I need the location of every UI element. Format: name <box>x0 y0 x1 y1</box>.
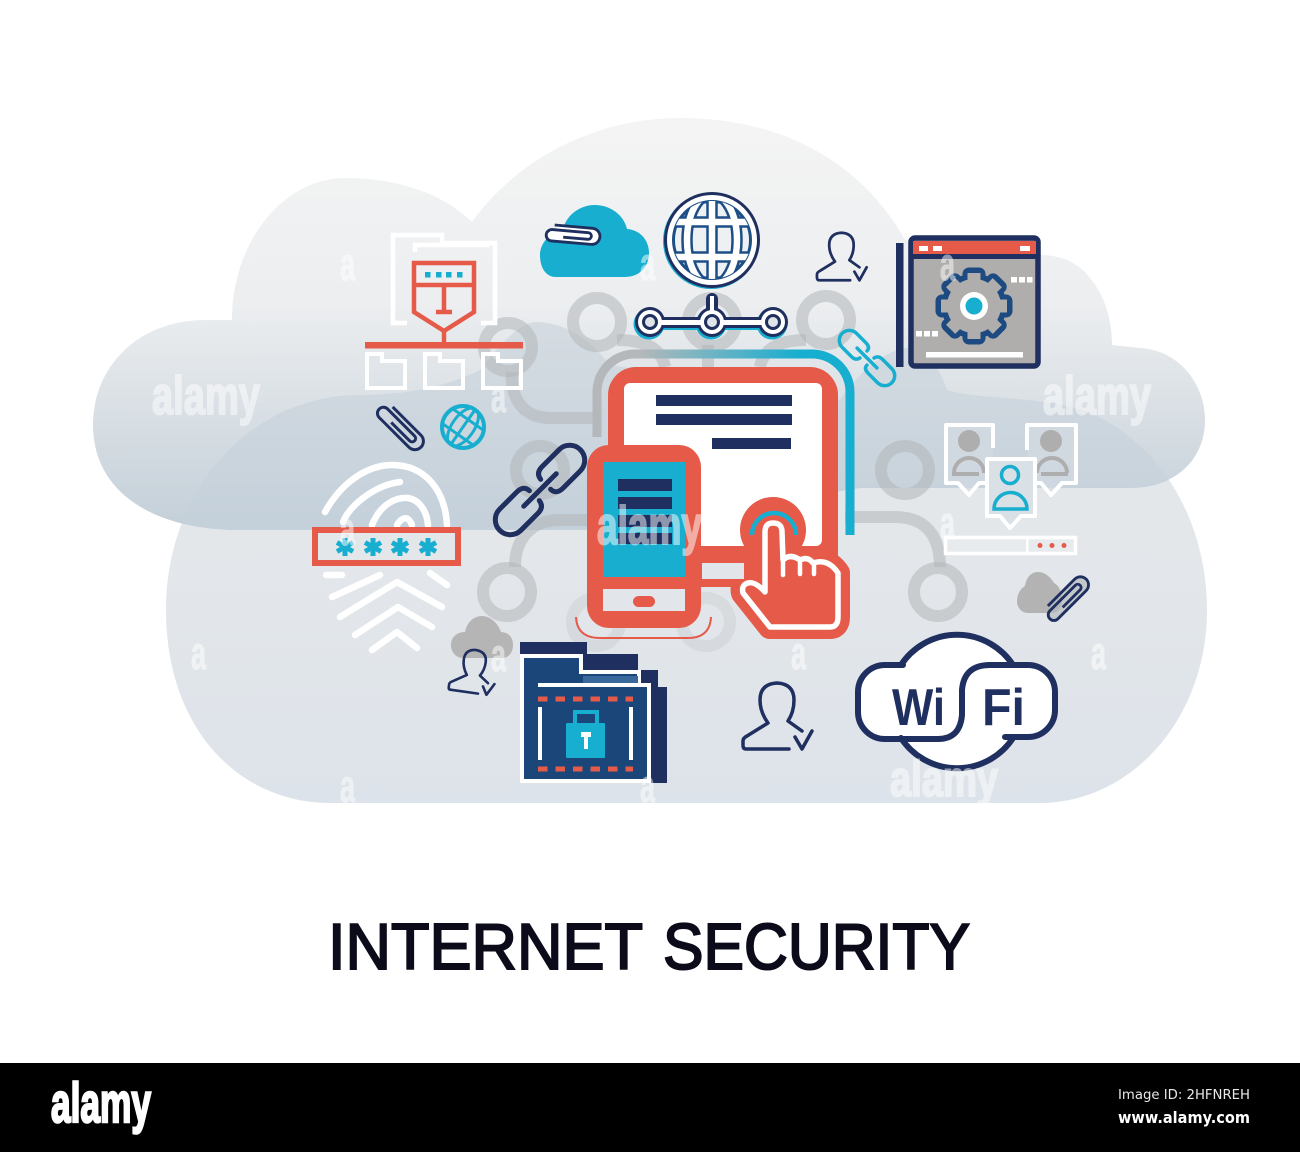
icon: chain link <box>489 439 591 541</box>
address bar <box>946 537 1076 554</box>
watermarks: a <box>640 238 655 290</box>
window details <box>916 277 1032 358</box>
watermarks: a <box>491 629 506 681</box>
side bar <box>896 243 904 367</box>
lower cloud <box>166 322 1207 803</box>
icon: cyan chain link <box>835 326 899 390</box>
cyan user <box>994 466 1027 509</box>
circuit rings and connectors <box>483 296 962 616</box>
icon: user check top <box>817 233 867 280</box>
watermarks: alamy <box>890 751 998 807</box>
icon: settings window <box>896 238 1038 367</box>
watermarks: alamy <box>597 496 702 556</box>
footer url: www.alamy.com <box>1118 1108 1250 1127</box>
icon: globe <box>660 193 764 289</box>
gray users <box>952 430 1068 476</box>
phone <box>587 445 701 628</box>
faint rings below devices <box>572 598 730 646</box>
title: INTERNET <box>328 910 643 983</box>
red bar <box>365 342 523 348</box>
watermarks: a <box>340 760 355 812</box>
front folder <box>522 656 649 781</box>
icon: speech bubble users <box>946 425 1076 528</box>
icon: gray cloud with paperclip <box>1017 572 1092 623</box>
tablet <box>608 367 838 587</box>
asterisks <box>337 538 436 556</box>
cyan touch arc <box>752 513 796 535</box>
cloud overlap <box>201 322 1168 530</box>
back folder layers <box>520 642 667 783</box>
arc under phone <box>576 617 711 638</box>
cloud backdrop <box>93 118 1207 803</box>
icon: small cyan globe <box>440 404 486 450</box>
watermarks: a <box>640 760 655 812</box>
icon: gray cloud with user <box>448 616 513 696</box>
window frame <box>911 238 1038 366</box>
phone text lines <box>618 479 672 544</box>
watermarks: a <box>1091 627 1106 679</box>
icon: wifi logo: Wi <box>892 679 945 737</box>
cyan dots <box>425 272 462 278</box>
bubble centre <box>987 459 1035 528</box>
arc behind tablet <box>597 354 850 535</box>
small folders <box>367 354 521 388</box>
watermarks: a <box>940 238 955 290</box>
watermarks: a <box>791 627 806 679</box>
footer image id: Image ID: 2HFNREH <box>1118 1087 1250 1103</box>
watermarks: a <box>340 238 355 290</box>
icon: pointing hand <box>702 497 838 627</box>
red shield server <box>414 263 474 345</box>
icon: fingerprint <box>325 465 447 650</box>
footer band <box>0 1063 1300 1152</box>
red dashes <box>538 699 633 769</box>
upper cloud <box>93 118 1205 530</box>
title <box>328 910 970 983</box>
tablet text lines <box>656 395 792 449</box>
bubble left <box>946 425 994 495</box>
watermarks: alamy <box>1043 366 1151 426</box>
watermarks <box>152 238 1151 812</box>
icon: user check large <box>743 683 812 749</box>
icon: wifi logo: Fi <box>982 679 1025 737</box>
title bar <box>913 241 1036 259</box>
watermarks: a <box>340 503 355 555</box>
watermarks: alamy <box>152 366 260 426</box>
watermarks: a <box>491 370 506 422</box>
icon: padlock <box>566 712 605 758</box>
icon: server folder hierarchy <box>365 235 523 388</box>
tablet slot <box>702 563 744 579</box>
icon: paperclip <box>375 401 427 453</box>
bubble right <box>1027 425 1076 495</box>
icon: wifi logo <box>858 634 1055 768</box>
title: SECURITY <box>663 910 970 983</box>
icon: network nodes <box>634 293 788 340</box>
icon: locked folder <box>520 642 667 783</box>
icon: gear <box>940 272 1008 340</box>
icon: password field <box>315 530 458 563</box>
watermarks: a <box>191 627 206 679</box>
white folder outline <box>393 235 495 323</box>
white side lines <box>538 707 633 760</box>
footer logo: alamy <box>51 1071 151 1134</box>
watermarks: a <box>940 497 955 549</box>
icon: cloud with paperclip <box>540 205 649 277</box>
